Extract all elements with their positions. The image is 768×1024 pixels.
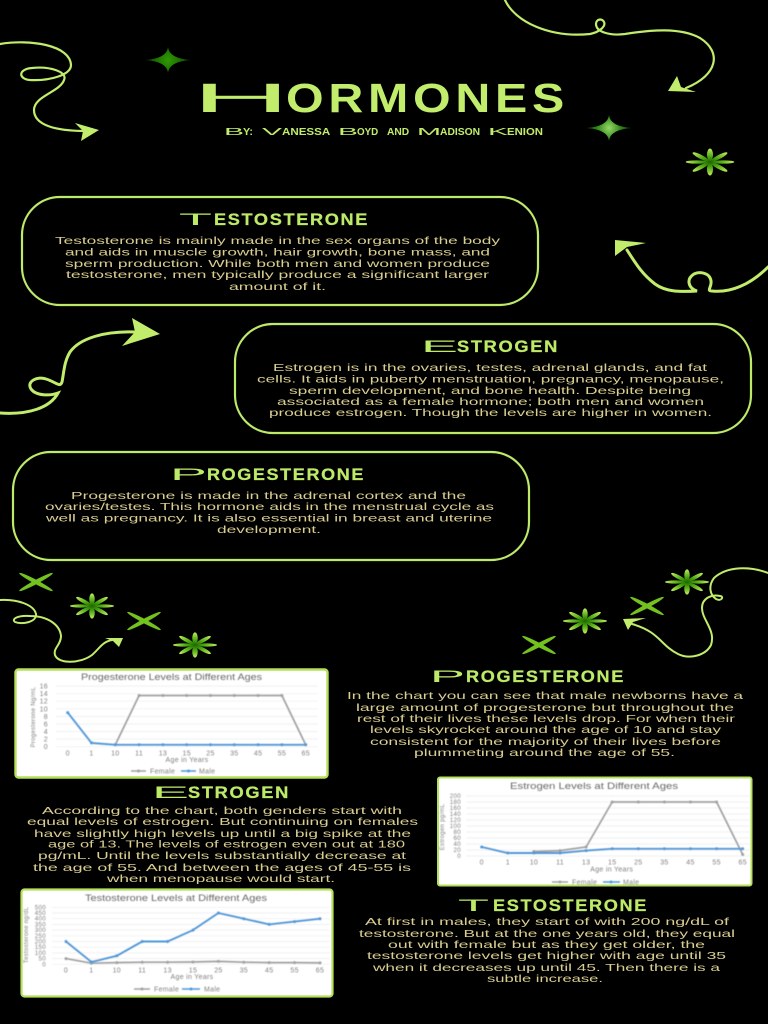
subtitle: authors: OYD [357,126,381,138]
text: testosterone description: Testosterone is mainly made in the sex organs of the body [55,236,502,247]
chart: estrogen levels: 20 [454,847,461,854]
text: progesterone description: ovaries/testes. This hormone aids in the menstrual cycle as [45,502,494,513]
icons: decorative cluster left [18,571,217,658]
chart: progesterone levels: 25 [206,750,215,758]
chart: testosterone levels: Testosterone ng/dL [24,906,30,963]
chart: estrogen levels: 40 [454,841,461,848]
chart: estrogen levels: 180 [450,799,461,806]
text: estrogen description: sperm development, and bone health. Despite being [289,386,692,397]
chart: estrogen levels: 160 [450,805,461,812]
chart: progesterone levels: 10 [111,750,119,758]
chart: testosterone levels: 50 [39,956,46,963]
chart: testosterone levels: 65 [316,968,324,974]
chart: estrogen levels: 80 [454,829,461,836]
chart: estrogen levels: 140 [450,811,461,818]
arrow: top right [505,0,714,92]
chart: testosterone levels: 1 [89,968,94,974]
heading: progesterone: ROGESTERONE [207,466,365,484]
chart: testosterone levels: 350 [35,921,46,928]
text: estrogen chart explanation [27,806,418,885]
icon: sparkle right [586,115,632,141]
heading: progesterone: P [170,466,207,484]
heading: testosterone: T [179,211,212,229]
chart: estrogen levels: 45 [686,860,695,866]
chart: testosterone levels: 200 [35,938,46,946]
chart: testosterone levels: 400 [35,916,46,923]
subtitle: authors: ADISON [440,126,483,138]
chart: estrogen levels: Male [623,880,639,886]
chart: estrogen levels: 55 [712,860,721,866]
text: estrogen description: associated as a female hormone; both men and women [277,397,704,408]
text: estrogen description [257,363,724,419]
text: progesterone description: well as pregnancy. It is also essential in breast and uterine [44,514,493,524]
heading: testosterone: ESTOSTERONE [214,211,369,229]
chart: progesterone levels: 12 [40,699,48,706]
chart: testosterone levels: 10 [113,968,121,974]
text: testosterone description: sperm production. While both men and women produce [65,259,491,270]
heading: estrogen: E [421,338,458,356]
chart: progesterone levels: Progesterone Levels at Different Ages [81,672,263,682]
text: progesterone chart explanation: In the chart you can see that male newborns have a [347,691,744,702]
chart: testosterone levels: 300 [35,927,46,934]
chart: testosterone levels: 500 [35,904,46,911]
subtitle: authors: ENION [507,126,543,138]
text: estrogen description: Estrogen is in the ovaries, testes, adrenal glands, and fat [273,363,707,374]
chart: estrogen levels: 1 [506,860,510,866]
chart: testosterone levels: 45 [265,968,273,974]
subtitle: authors: B [224,126,244,138]
text: progesterone description: Progesterone is made in the adrenal cortex and the [71,491,467,502]
text: estrogen chart explanation: pg/mL. Until the levels substantially decrease at [38,851,406,862]
arrow: right of testosterone [615,240,768,291]
chart: progesterone levels: 1 [89,750,94,758]
chart: estrogen levels [438,778,752,886]
subtitle: authors: M [417,126,441,138]
text: testosterone description: and aids in muscle growth, hair growth, bone mass, and [65,248,491,258]
chart: estrogen levels: 25 [634,860,642,866]
chart: progesterone levels: 35 [230,750,238,758]
text: progesterone chart explanation: levels skyrocket around the age of 10 and stay [370,725,723,736]
chart: progesterone levels: 10 [40,706,48,713]
text: estrogen chart explanation: the age of 55. And between the ages of 45-55 is [33,863,411,874]
chart: progesterone levels: 2 [44,737,48,744]
chart: testosterone levels: 15 [189,968,197,974]
text: estrogen chart explanation: According to the chart, both genders start with [42,806,402,817]
chart: testosterone levels: 25 [214,968,223,974]
text: testosterone chart explanation: At first in males, they start of with 200 ng/dL of [365,917,729,928]
chart: testosterone levels: Age in Years [171,974,214,981]
text: testosterone chart explanation: subtle increase. [487,974,603,985]
chart: progesterone levels: Age in Years [166,757,209,764]
text: testosterone description: testosterone, men typically produce a significant larger [66,270,490,281]
panel: estrogen [235,324,751,433]
chart: estrogen levels: 35 [660,860,669,866]
chart: progesterone levels: Female [150,768,175,776]
chart: progesterone levels: 13 [159,750,167,758]
text: testosterone chart explanation: testosterone levels get higher with age until 35 [367,951,727,962]
chart: estrogen levels: 13 [582,860,590,866]
chart: estrogen levels: 120 [450,817,461,824]
text: estrogen chart explanation: have slightly high levels up until a big spike at the [34,829,412,840]
text: progesterone chart explanation [347,691,744,759]
subtitle: authors: AND [387,126,412,138]
subtitle: authors: B [338,126,358,138]
chart: testosterone levels: Testosterone Levels at Different Ages [85,893,268,903]
chart: estrogen levels: 100 [450,823,461,830]
text: progesterone chart explanation: large amount of progesterone but throughout the [356,703,735,714]
panel: progesterone [13,452,529,560]
text: progesterone description: development. [217,525,321,536]
chart: progesterone levels: 65 [302,750,310,758]
section: estrogen chart explanation [27,784,418,885]
text: testosterone chart explanation: out with female but as they get older, the [388,940,706,951]
chart: estrogen levels: Age in Years [590,866,633,874]
chart: testosterone levels: 250 [35,933,46,940]
text: testosterone chart explanation: testosterone. But at the one years old, they equal [359,929,735,940]
chart: testosterone levels: 0 [42,961,46,968]
heading: estrogen: STROGEN [457,338,559,356]
title: H [192,75,290,121]
heading: estrogen chart: STROGEN [188,784,290,802]
text: estrogen chart explanation: age of 13. The levels of estrogen even out at 180 [48,840,406,850]
subtitle: authors: K [488,126,508,138]
chart: estrogen levels: 65 [739,860,747,866]
chart: estrogen levels: Estrogen Levels at Different Ages [510,781,679,791]
chart: progesterone levels: 8 [44,714,48,721]
heading: progesterone chart: ROGESTERONE [466,668,625,686]
chart: progesterone levels: 0 [44,744,48,751]
icons: decorative cluster right [521,569,709,656]
arrow: top left [0,42,99,141]
section: testosterone chart explanation [359,897,735,985]
chart: testosterone levels: 11 [138,968,146,974]
text: testosterone description: amount of it. [229,282,326,293]
text: testosterone chart explanation [359,917,735,985]
chart: progesterone levels: Progesterone Ng/mL [31,686,37,747]
chart: progesterone levels: 6 [44,722,48,728]
chart: progesterone levels: 45 [254,750,262,758]
chart: progesterone levels: 16 [40,684,48,691]
text: progesterone description [44,491,494,536]
title: ORMONES [286,75,569,121]
chart: testosterone levels: 450 [35,910,46,917]
heading: progesterone chart: P [430,668,465,686]
chart: testosterone levels: 35 [240,968,248,974]
text: estrogen chart explanation: equal levels of estrogen. But continuing on females [27,817,418,828]
chart: testosterone levels [22,890,332,996]
chart: progesterone levels: Male [199,768,215,776]
text: estrogen chart explanation: when menopause would start. [105,874,335,885]
chart: progesterone levels: 0 [66,750,70,758]
chart: estrogen levels: Female [572,880,597,886]
text: progesterone chart explanation: consistent for the majority of their lives before [370,737,722,748]
section: progesterone chart explanation [347,668,744,759]
text: progesterone chart explanation: rest of their lives these levels drop. For when their [357,714,736,725]
chart: progesterone levels: 14 [40,691,48,698]
chart: estrogen levels: Estrogen pg/mL [440,803,446,850]
chart: estrogen levels: 0 [480,860,484,866]
text: testosterone chart explanation: when it decreases up until 45. Then there is a [371,963,721,974]
chart: estrogen levels: 10 [530,860,538,866]
subtitle: authors: V [262,126,282,138]
arrow: left of estrogen [0,318,160,413]
heading: estrogen chart: E [152,784,189,802]
chart: estrogen levels: 60 [454,835,461,842]
chart: testosterone levels: Female [154,986,179,994]
icon: sparkle left [145,47,191,73]
subtitle: authors: ANESSA [282,126,333,138]
panel: testosterone [22,197,538,305]
arrow: bottom left [0,600,123,662]
subtitle: authors: Y: [243,126,256,138]
icon: flower top right [686,148,734,176]
text: progesterone chart explanation: plummeting around the age of 55. [414,748,675,759]
chart: progesterone levels: 55 [278,750,286,758]
chart: testosterone levels: 13 [163,968,172,974]
chart: estrogen levels: 15 [608,860,616,866]
chart: progesterone levels: 15 [183,750,191,758]
chart: progesterone levels [16,670,328,778]
chart: testosterone levels: Male [204,986,220,994]
arrow: bottom right [623,568,768,657]
text: estrogen description: produce estrogen. Though the levels are higher in women. [269,408,712,419]
text: estrogen description: cells. It aids in puberty menstruation, pregnancy, menopause, [257,374,724,386]
chart: testosterone levels: 100 [35,950,46,957]
chart: estrogen levels: 11 [556,860,564,866]
heading: testosterone chart: T [458,897,489,915]
chart: estrogen levels: 0 [457,853,461,860]
chart: progesterone levels: 11 [135,750,143,758]
chart: progesterone levels: 4 [44,729,48,736]
heading: testosterone chart: ESTOSTERONE [493,897,648,915]
text: testosterone description [55,236,502,293]
chart: estrogen levels: 200 [450,793,461,800]
chart: testosterone levels: 150 [35,944,46,951]
chart: testosterone levels: 55 [290,968,299,974]
chart: testosterone levels: 0 [64,968,68,974]
